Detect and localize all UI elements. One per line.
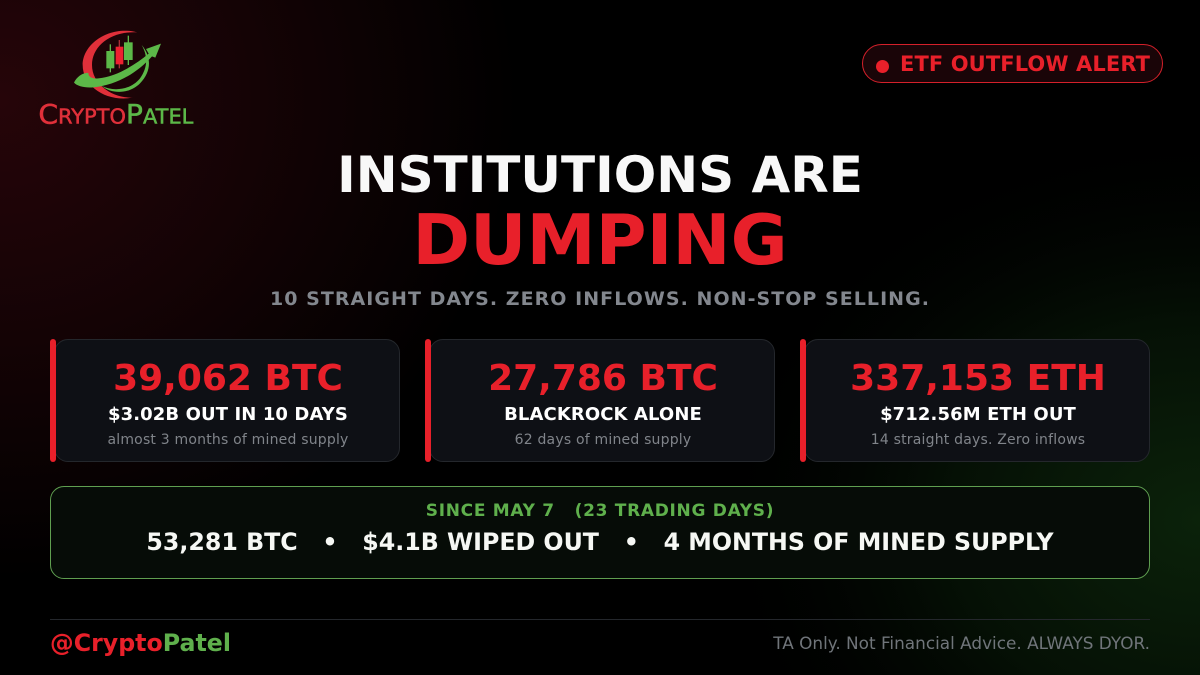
icon: candlesticks: [106, 36, 133, 72]
stat number: 39,062 BTC: [113, 358, 343, 399]
summary figures: 53,281 BTC • $4.1B WIPED OUT • 4 MONTHS OF MINED SUPPLY: [146, 528, 1054, 556]
icon: green swoosh arrow: [74, 44, 161, 92]
footer handle: @CryptoPatel: [50, 629, 231, 657]
stat label: BLACKROCK ALONE: [504, 404, 702, 425]
title line 2: DUMPING: [412, 200, 788, 281]
stat caption: almost 3 months of mined supply: [107, 432, 349, 448]
stat caption: 62 days of mined supply: [515, 432, 691, 448]
stat number: 27,786 BTC: [488, 358, 718, 399]
summary heading: SINCE MAY 7 (23 TRADING DAYS): [426, 501, 774, 521]
stat label: $712.56M ETH OUT: [880, 404, 1076, 425]
stat label: $3.02B OUT IN 10 DAYS: [108, 404, 348, 425]
alert badge: [862, 44, 1163, 83]
icon: red dot: [876, 60, 889, 73]
panel: stat card 1: [50, 339, 400, 462]
logo: CryptoPatel: [38, 30, 194, 130]
stat number: 337,153 ETH: [850, 358, 1106, 399]
footer divider: [50, 619, 1150, 620]
panel: stat card 3: [800, 339, 1150, 462]
icon: red ring: [83, 31, 137, 98]
title line 1: INSTITUTIONS ARE: [337, 146, 863, 204]
panel: since May 7 summary: [50, 486, 1150, 579]
logo wordmark: CRYPTOPATEL: [38, 99, 194, 130]
footer disclaimer: TA Only. Not Financial Advice. ALWAYS DYOR.: [773, 633, 1150, 653]
badge text: ETF OUTFLOW ALERT: [900, 52, 1150, 76]
stat caption: 14 straight days. Zero inflows: [871, 432, 1085, 448]
subtitle: 10 STRAIGHT DAYS. ZERO INFLOWS. NON-STOP SELLING.: [270, 288, 930, 310]
panel: stat card 2: [425, 339, 775, 462]
